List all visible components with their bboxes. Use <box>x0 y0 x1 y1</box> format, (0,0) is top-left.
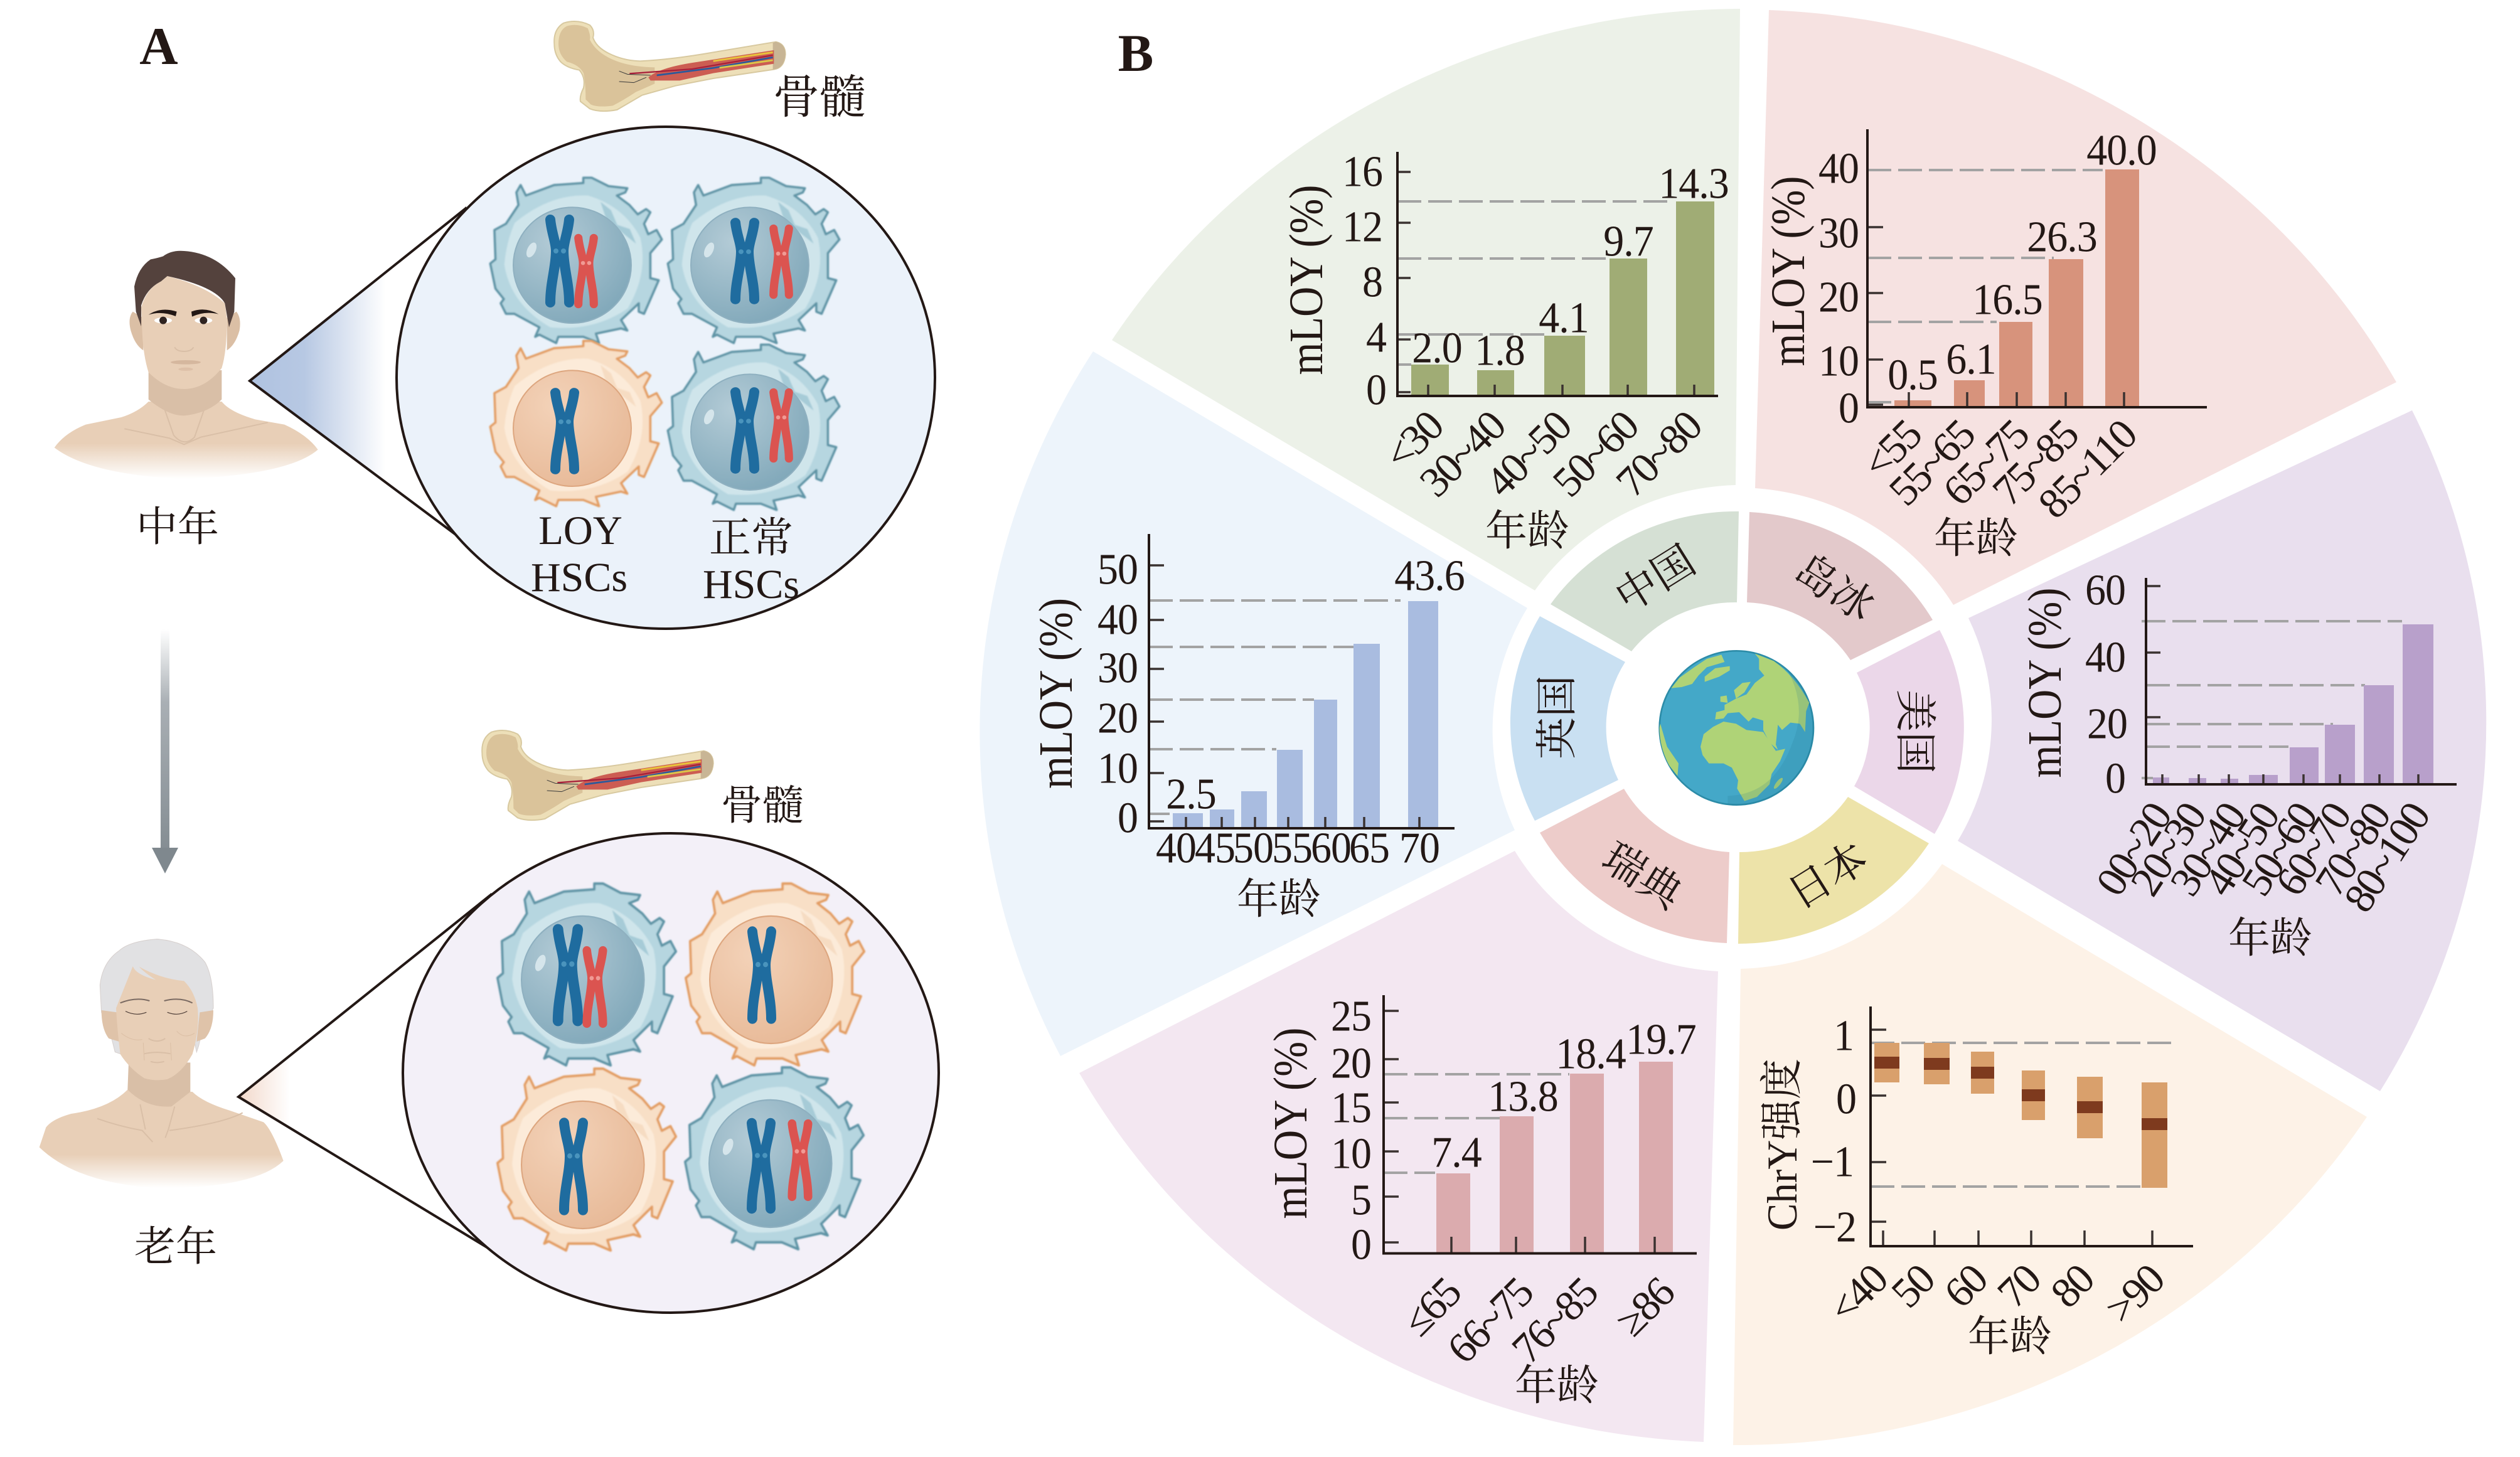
ring segment: UK: 英国 <box>1534 675 1581 759</box>
x tick labels: <30 <box>1375 402 1452 479</box>
zoom cone: middle age <box>250 209 465 542</box>
chart: UK <box>1030 534 1465 923</box>
ring segment: Sweden: 瑞典 <box>1594 834 1692 919</box>
label: normal HSCs: 正常 <box>709 515 793 562</box>
label: LOY HSCs: LOY <box>538 508 622 553</box>
x tick labels <box>1393 1268 1683 1372</box>
x tick labels: 55 <box>1272 823 1312 872</box>
y-axis title: mLOY (%) <box>1030 598 1082 789</box>
x tick labels: 70~80 <box>1606 402 1711 506</box>
x tick labels: 75~85 <box>1983 410 2087 515</box>
axes and ticks <box>1397 172 1694 396</box>
value labels: 14.3 <box>1658 159 1729 208</box>
x tick labels: ≥86 <box>1606 1268 1683 1345</box>
label: bone marrow, old age: 骨髓 <box>721 783 804 829</box>
axes and ticks <box>1384 1011 1655 1253</box>
y-axis title: mLOY (%) <box>1762 176 1815 366</box>
x-axis title: 年龄 <box>2228 915 2312 962</box>
value labels <box>1412 159 1729 375</box>
cell: normal HSC top left <box>490 178 662 343</box>
dashed guides <box>1871 1043 2172 1187</box>
x tick labels: 60~70 <box>2266 794 2360 904</box>
x-axis title: 年龄 <box>1515 1363 1599 1409</box>
label: LOY HSCs <box>531 508 627 600</box>
dashed guides <box>1384 1074 1569 1173</box>
bars <box>1173 601 1438 828</box>
cell: normal HSC bottom right <box>685 1067 863 1249</box>
bars <box>1436 1062 1673 1254</box>
y tick labels: 40 <box>1097 595 1138 644</box>
value labels <box>1887 125 2157 399</box>
x tick labels: 30~40 <box>2160 794 2255 904</box>
cell: LOY HSC bottom left <box>498 1069 676 1251</box>
chart: Sweden <box>1264 991 1697 1409</box>
y tick labels: 0 <box>1366 365 1386 414</box>
y tick labels: 1 <box>1834 1011 1854 1060</box>
y tick labels: 10 <box>1097 744 1138 793</box>
ring segment: Japan: 日本 <box>1780 834 1876 918</box>
label: middle age: 中年 <box>136 504 219 550</box>
value labels: 0.5 <box>1887 350 1938 399</box>
x tick labels: 70~80 <box>2305 794 2400 904</box>
axes and ticks <box>2146 586 2418 784</box>
sector: Japan background <box>1733 864 2367 1445</box>
y tick labels: 40 <box>1818 144 1859 193</box>
value labels: 2.5 <box>1166 769 1216 818</box>
sector: Iceland background <box>1755 10 2396 605</box>
y tick labels <box>1811 1011 1856 1251</box>
y tick labels: 8 <box>1362 257 1382 306</box>
circle: old-age HSC population <box>403 833 939 1313</box>
x tick labels: 55~65 <box>1879 410 1983 515</box>
x-axis title: 年龄 <box>1934 516 2018 562</box>
x tick labels <box>1819 1255 2173 1332</box>
x tick labels: 80 <box>2041 1255 2103 1316</box>
y tick labels: 16 <box>1342 147 1382 196</box>
x tick labels: <55 <box>1853 410 1930 488</box>
x tick labels: 40~50 <box>1476 402 1580 506</box>
x tick labels: 50~60 <box>2232 794 2326 904</box>
panel A: middle age and old age bone marrow <box>40 21 939 1313</box>
bars <box>1411 201 1714 396</box>
value labels: 13.8 <box>1488 1072 1558 1121</box>
label: normal HSCs <box>703 515 799 607</box>
dashed guides <box>1149 600 1401 814</box>
x tick labels: 50~60 <box>1543 402 1647 506</box>
icon: globe <box>1658 650 1815 806</box>
y tick labels: 20 <box>1331 1038 1371 1087</box>
ring segment: USA: 美国 <box>1891 690 1938 774</box>
x tick labels: 60 <box>1311 823 1351 872</box>
value labels <box>1431 1015 1696 1177</box>
label: normal HSCs: HSCs <box>703 562 799 607</box>
value labels: 19.7 <box>1626 1015 1696 1064</box>
y tick labels: 5 <box>1351 1175 1371 1224</box>
value labels: 4.1 <box>1539 293 1589 342</box>
x tick labels: 76~85 <box>1502 1268 1606 1372</box>
y tick labels: 20 <box>1097 693 1138 742</box>
value labels: 43.6 <box>1394 551 1465 600</box>
x tick labels: 45 <box>1195 823 1235 872</box>
ring segment: USA <box>1854 630 1964 834</box>
y tick labels <box>1818 144 1859 432</box>
icon: elderly person <box>40 939 284 1188</box>
value labels <box>1166 551 1465 818</box>
dashed guides <box>1867 170 2103 402</box>
zoom cone: old age <box>238 895 499 1255</box>
y tick labels: 0 <box>1839 383 1859 432</box>
x tick labels: 50 <box>1882 1255 1943 1316</box>
dashed guides <box>1397 201 1674 365</box>
x tick labels <box>1375 402 1711 506</box>
panel label A: A <box>139 17 178 76</box>
circle: middle-age HSC population <box>397 127 935 629</box>
y-axis title: mLOY (%) <box>1280 184 1333 375</box>
y tick labels <box>1097 545 1138 842</box>
x tick labels: 40 <box>1156 823 1196 872</box>
y tick labels: 50 <box>1097 545 1138 594</box>
axes and ticks <box>1867 227 2124 407</box>
ring segment: China: 中国 <box>1608 537 1704 621</box>
y tick labels: 30 <box>1097 643 1138 692</box>
x tick labels <box>2086 794 2439 921</box>
y tick labels: 20 <box>2087 699 2127 748</box>
ring segment: China <box>1551 511 1739 651</box>
chart: USA <box>2019 565 2457 962</box>
cell: normal HSC top left <box>498 883 676 1065</box>
value labels: 9.7 <box>1603 216 1653 265</box>
y-axis title: mLOY (%) <box>1264 1028 1317 1219</box>
x tick labels <box>1156 823 1439 872</box>
y-axis title: ChrY强度 <box>1758 1059 1806 1230</box>
bars <box>2153 624 2433 784</box>
median marks <box>1874 1057 2167 1130</box>
ring segment: UK <box>1510 616 1625 821</box>
x tick labels: 80~100 <box>2334 794 2439 921</box>
x tick labels: 85~110 <box>2029 410 2145 527</box>
x tick labels: 65~75 <box>1933 410 2037 515</box>
chart: Iceland <box>1762 125 2207 562</box>
y tick labels: 60 <box>2085 565 2125 614</box>
y tick labels: 12 <box>1342 202 1382 251</box>
y tick labels: 0 <box>1118 793 1138 842</box>
panel label B: B <box>1118 24 1153 83</box>
cell: LOY HSC bottom left <box>490 341 662 506</box>
y tick labels: 10 <box>1331 1129 1371 1178</box>
sector: USA background <box>1958 410 2486 1091</box>
panel B: circular country diagram <box>980 9 2486 1445</box>
y-axis title: mLOY (%) <box>2019 587 2071 778</box>
x tick labels: 00~20 <box>2086 794 2181 904</box>
boxes <box>1874 1043 2167 1188</box>
x tick labels: 70 <box>1399 823 1439 872</box>
label: LOY HSCs: HSCs <box>531 555 627 600</box>
y tick labels: 20 <box>1818 272 1859 321</box>
chart: China <box>1280 147 1729 555</box>
x tick labels: >90 <box>2096 1255 2173 1332</box>
value labels: 7.4 <box>1431 1128 1482 1177</box>
y tick labels: −2 <box>1813 1202 1856 1251</box>
x tick labels: 60 <box>1935 1255 1996 1316</box>
y tick labels: 0 <box>1836 1074 1856 1123</box>
value labels: 16.5 <box>1972 275 2042 324</box>
dashed guides <box>2142 621 2402 778</box>
arrow: ageing direction <box>152 629 178 873</box>
x tick labels: 30~40 <box>1410 402 1514 506</box>
y tick labels <box>1331 991 1371 1269</box>
x tick labels <box>1853 410 2145 527</box>
bars <box>1894 169 2139 407</box>
y tick labels <box>2085 565 2127 803</box>
axes and ticks <box>1149 565 1419 828</box>
icon: middle-aged man <box>55 251 318 479</box>
sector: UK background <box>980 351 1527 1056</box>
sector: China background <box>1112 9 1740 590</box>
x tick labels: <40 <box>1819 1255 1896 1332</box>
y tick labels: 4 <box>1366 312 1386 361</box>
cell: normal HSC bottom right <box>668 344 840 510</box>
icon: bone with marrow, middle age <box>554 21 786 111</box>
y tick labels: 40 <box>2085 632 2125 681</box>
ring segment: Japan <box>1738 797 1929 944</box>
x tick labels: ≤65 <box>1393 1268 1470 1345</box>
value labels: 1.8 <box>1475 326 1525 375</box>
chart: Japan <box>1758 1006 2193 1360</box>
ring segment: Sweden <box>1540 789 1729 943</box>
y tick labels <box>1342 147 1386 414</box>
x tick labels: 70 <box>1988 1255 2049 1316</box>
x tick labels: 66~75 <box>1438 1268 1542 1372</box>
x tick labels: 50 <box>1233 823 1273 872</box>
value labels: 6.1 <box>1946 334 1996 383</box>
x-axis title: 年龄 <box>1237 877 1321 923</box>
x-axis title: 年龄 <box>1968 1314 2052 1360</box>
x tick labels: 40~50 <box>2194 794 2288 904</box>
x tick labels: 20~30 <box>2121 794 2215 904</box>
y tick labels: 0 <box>1351 1220 1371 1269</box>
value labels: 26.3 <box>2027 212 2097 261</box>
x-axis title: 年龄 <box>1485 508 1569 555</box>
y tick labels: 25 <box>1331 991 1371 1040</box>
axes and ticks <box>1871 1030 2152 1246</box>
y tick labels: 10 <box>1818 336 1859 385</box>
x tick labels: 65 <box>1349 823 1389 872</box>
value labels: 2.0 <box>1412 323 1462 372</box>
value labels: 40.0 <box>2086 125 2157 174</box>
sector: Sweden background <box>1079 851 1718 1442</box>
cell: LOY HSC top right <box>686 883 864 1065</box>
y tick labels: −1 <box>1811 1137 1854 1186</box>
cell: normal HSC top right <box>668 178 840 343</box>
ring segment: Iceland: 岛冰 <box>1786 546 1882 630</box>
y tick labels: 0 <box>2105 754 2125 803</box>
label: old age: 老年 <box>134 1224 217 1270</box>
ring segment: Iceland <box>1747 512 1933 660</box>
label: bone marrow, middle age: 骨髓 <box>773 72 866 124</box>
value labels: 18.4 <box>1556 1029 1626 1078</box>
y tick labels: 15 <box>1331 1083 1371 1132</box>
y tick labels: 30 <box>1818 208 1859 257</box>
icon: bone with marrow, old age <box>482 730 713 820</box>
